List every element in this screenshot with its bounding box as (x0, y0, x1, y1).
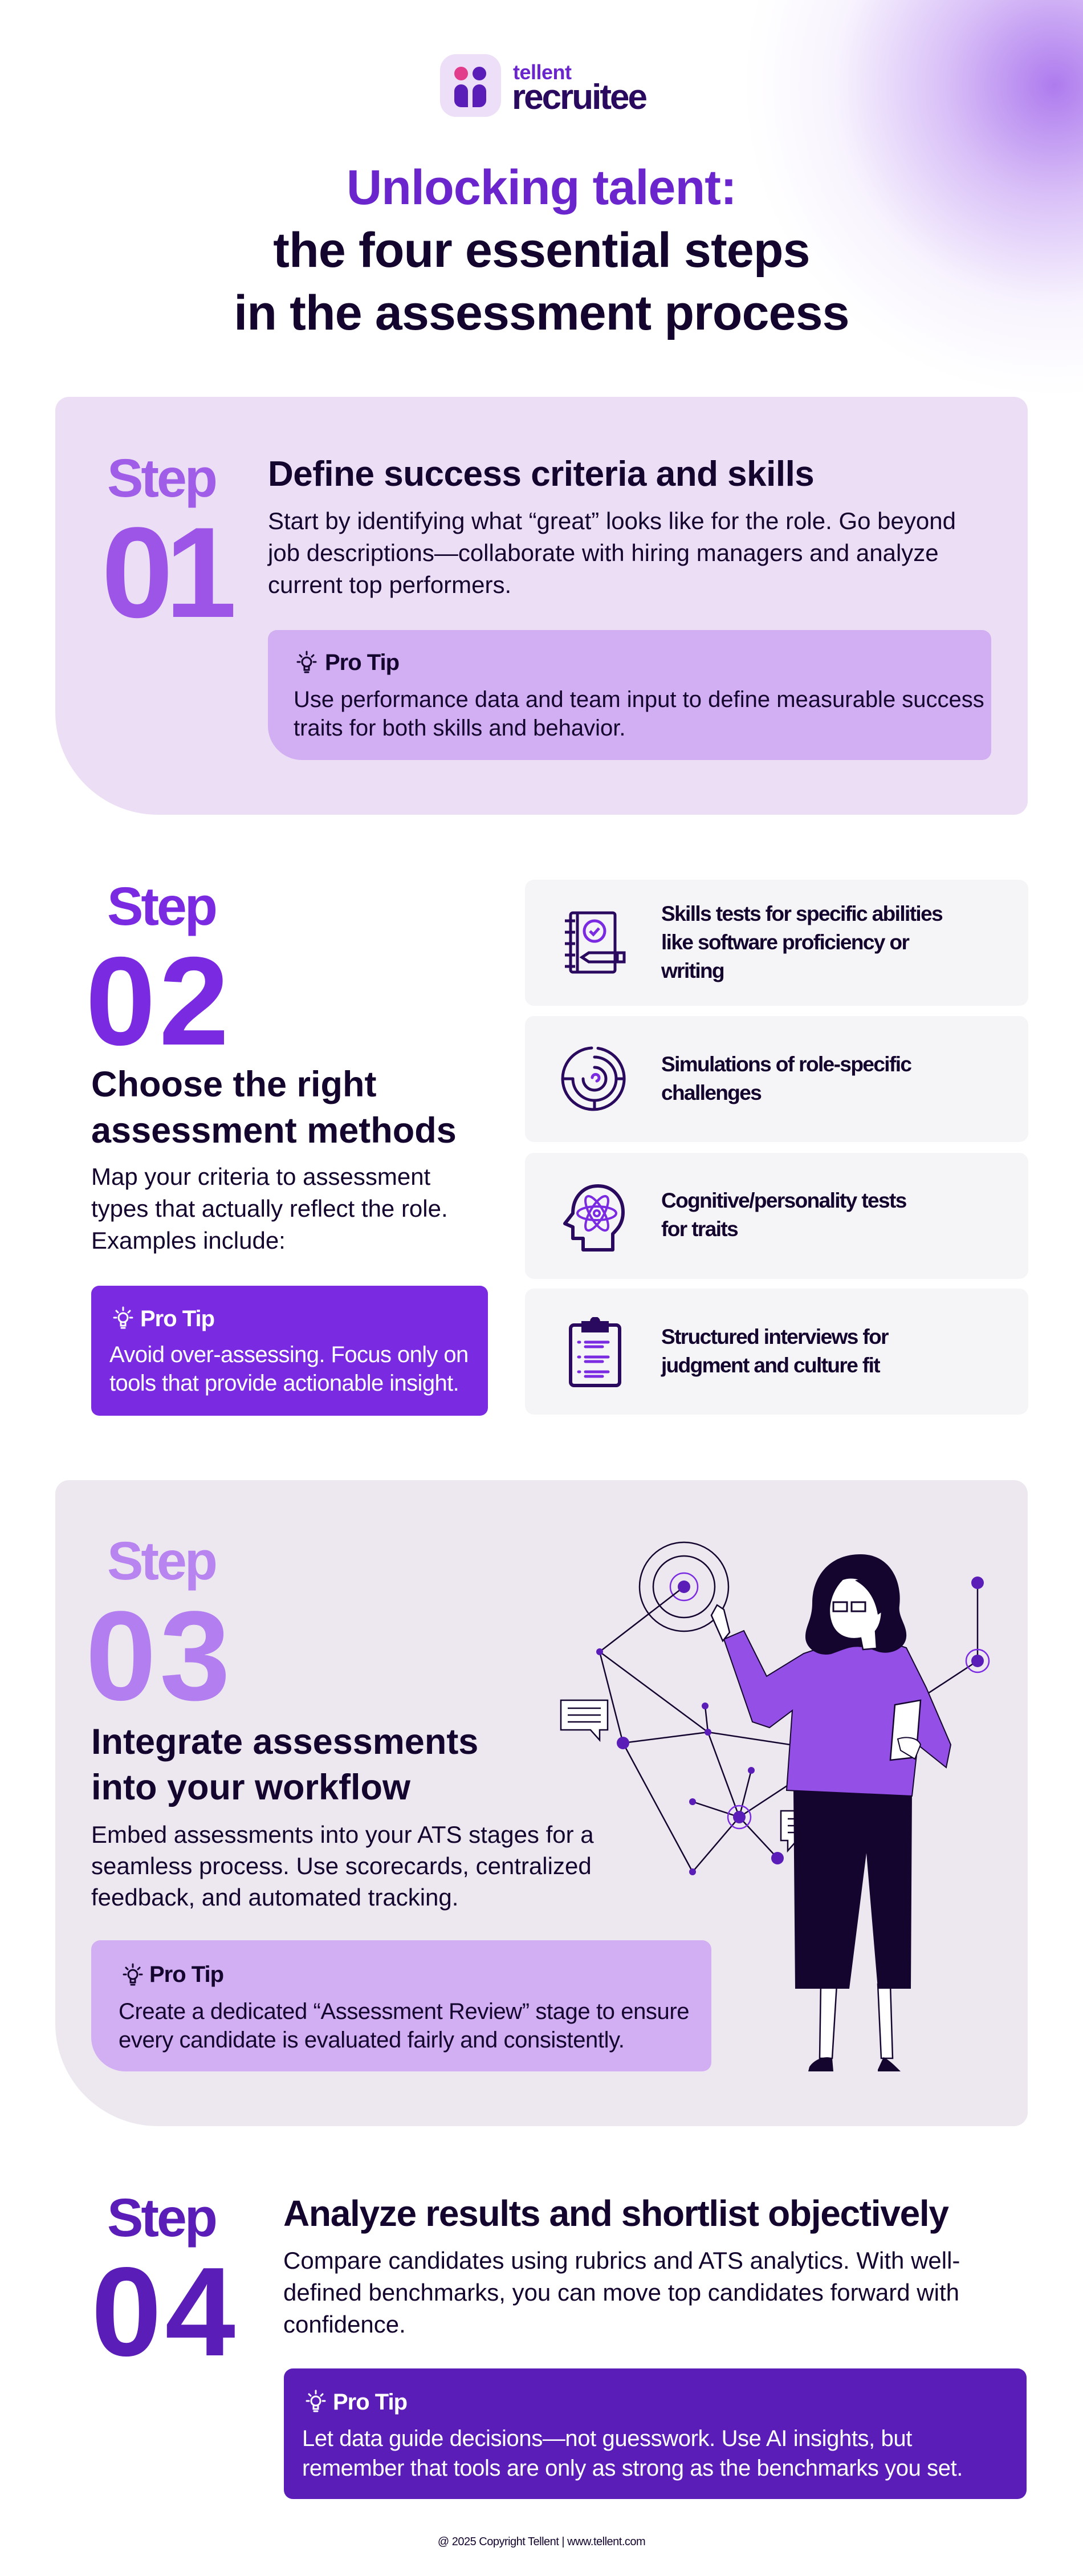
icon: maze (561, 1047, 626, 1111)
title: in the assessment process (234, 286, 849, 340)
item: skills tests (525, 880, 1028, 1006)
step 2 body: types that actually reflect the role. (91, 1195, 448, 1222)
step 2 body (91, 1163, 448, 1254)
step 2 label: Step (107, 876, 215, 937)
step 3 heading: Integrate assessments (91, 1722, 478, 1762)
icon: bulb (296, 651, 317, 673)
item: structured interviews: Structured interviews for (661, 1325, 888, 1348)
logo icon (440, 54, 501, 117)
pro tip 4: remember that tools are only as strong as the benchmarks you set. (302, 2456, 963, 2481)
step 3 label: Step (107, 1531, 215, 1591)
pants (793, 1790, 912, 1989)
hair (805, 1554, 906, 1655)
icon: bulb (123, 1964, 142, 1985)
step 3 number: 03 (85, 1585, 234, 1727)
illustration: woman with network (560, 1542, 990, 2071)
step 4 body (283, 2247, 960, 2338)
face (829, 1578, 882, 1649)
item: structured interviews (525, 1289, 1028, 1415)
step 2 number: 02 (85, 931, 233, 1071)
step 3 body: seamless process. Use scorecards, centralized (91, 1852, 592, 1879)
step 4 body: defined benchmarks, you can move top candidates forward with (283, 2279, 959, 2306)
step 4 heading: Analyze results and shortlist objectively (283, 2193, 948, 2234)
pro tip 3: Pro Tip (149, 1962, 223, 1987)
item: skills tests: Skills tests for specific abilities (661, 902, 942, 925)
pro tip 1: Pro Tip (325, 650, 399, 675)
speech bubbles (561, 1700, 828, 1851)
icon: clipboard (569, 1317, 621, 1387)
step 2 heading (91, 1064, 457, 1151)
icon: head with atom (563, 1184, 625, 1252)
step 2 heading: Choose the right (91, 1064, 376, 1104)
pro tip 4 (284, 2368, 1027, 2499)
title: the four essential steps (273, 223, 810, 278)
logo text: tellent (513, 60, 572, 84)
pro tip 2: tools that provide actionable insight. (109, 1371, 459, 1396)
pro tip 3: Create a dedicated “Assessment Review” stage to ensure (119, 1999, 689, 2024)
decorative gradient blob (741, 0, 1083, 399)
item: simulations (525, 1016, 1028, 1142)
footer: @ 2025 Copyright Tellent | www.tellent.com (438, 2536, 645, 2548)
step 1 label: Step (107, 448, 215, 509)
step 4 body: confidence. (283, 2311, 406, 2338)
title: Unlocking talent: (347, 160, 736, 215)
step 2 body: Map your criteria to assessment (91, 1163, 430, 1190)
legs and shoes (820, 1984, 893, 2058)
step 1 body: Start by identifying what “great” looks like for the role. Go beyond (268, 507, 956, 534)
item: skills tests: like software proficiency or (661, 931, 909, 954)
item: cognitive tests: Cognitive/personality tests (661, 1189, 906, 1212)
step 3 heading (91, 1722, 478, 1807)
step 1 body (267, 507, 956, 598)
icon: bulb (306, 2390, 326, 2412)
item: cognitive tests (525, 1153, 1028, 1279)
step 1 body: current top performers. (268, 571, 511, 598)
step 2 body: Examples include: (91, 1227, 286, 1254)
logo (440, 54, 646, 117)
sweater (724, 1631, 951, 1796)
step 1 heading: Define success criteria and skills (268, 454, 814, 494)
step 2 heading: assessment methods (91, 1111, 457, 1151)
step 3 body (91, 1821, 594, 1911)
item: skills tests: writing (661, 959, 724, 982)
pro tip 1: Use performance data and team input to define measurable success (294, 687, 984, 712)
pro tip 2: Pro Tip (140, 1306, 214, 1331)
raised hand (711, 1605, 730, 1641)
icon: bulb (113, 1307, 133, 1328)
item: simulations: challenges (661, 1081, 761, 1104)
icon: notebook (565, 911, 626, 974)
step 3 body: feedback, and automated tracking. (91, 1884, 458, 1911)
step 3 body: Embed assessments into your ATS stages for a (91, 1821, 594, 1848)
step 4 label: Step (107, 2188, 215, 2248)
step 4 number: 04 (91, 2241, 239, 2383)
panel: step 3 (55, 1480, 1028, 2126)
pro tip 2: Avoid over-assessing. Focus only on (109, 1342, 469, 1367)
tablet and hand (890, 1700, 921, 1760)
step 1 body: job descriptions—collaborate with hiring managers and analyze (268, 539, 939, 566)
pro tip 4: Pro Tip (333, 2390, 407, 2415)
step 3 heading: into your workflow (91, 1768, 410, 1807)
logo: recruitee (512, 78, 646, 117)
pro tip 2 (91, 1286, 488, 1416)
item: simulations: Simulations of role-specific (661, 1053, 911, 1076)
pro tip 1: traits for both skills and behavior. (294, 716, 626, 741)
item: cognitive tests: for traits (661, 1217, 738, 1241)
title (234, 160, 849, 340)
step 4 body: Compare candidates using rubrics and ATS analytics. With well- (283, 2247, 960, 2274)
panel: step 1 (55, 397, 1028, 815)
pro tip 3 (91, 1940, 711, 2071)
pro tip 1 (268, 630, 991, 760)
step 1 number: 01 (101, 500, 229, 644)
pro tip 4: Let data guide decisions—not guesswork. Use AI insights, but (302, 2426, 912, 2451)
item: structured interviews: judgment and culture fit (661, 1354, 880, 1377)
pro tip 3: every candidate is evaluated fairly and consistently. (119, 2028, 624, 2053)
